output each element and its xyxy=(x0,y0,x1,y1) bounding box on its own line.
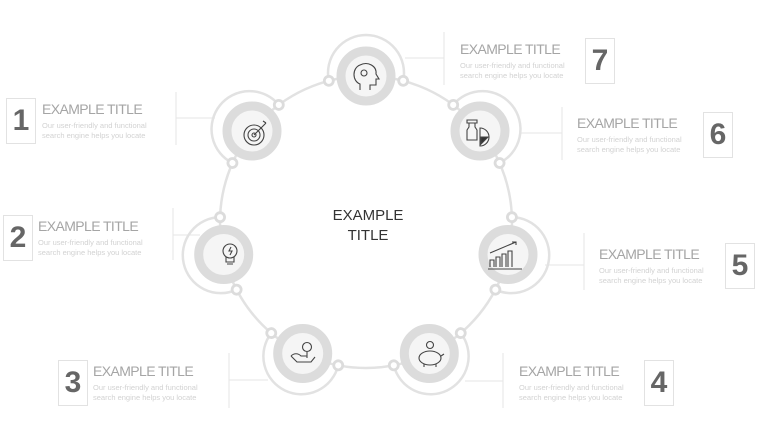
block 5: 5 xyxy=(732,249,748,282)
node discs xyxy=(199,51,533,378)
block 6: 6 xyxy=(710,118,726,151)
block 4: Our user-friendly and functional xyxy=(519,383,624,392)
main ring xyxy=(220,76,512,368)
icon: chess and pie xyxy=(467,120,489,146)
icon: bulb xyxy=(223,244,237,264)
block 3: 3 xyxy=(65,366,81,399)
icon: target xyxy=(244,121,266,145)
block 6: Our user-friendly and functional xyxy=(577,135,682,144)
block 1 xyxy=(6,98,147,144)
center title xyxy=(333,207,403,244)
block 2: search engine helps you locate xyxy=(38,248,141,257)
block 7: search engine helps you locate xyxy=(460,71,563,80)
block 1: EXAMPLE TITLE xyxy=(42,101,142,117)
node outer arcs xyxy=(175,35,557,407)
block 2: EXAMPLE TITLE xyxy=(38,218,138,234)
block 5 xyxy=(599,243,755,289)
icon: hand with coin xyxy=(291,342,315,362)
block 5: EXAMPLE TITLE xyxy=(599,246,699,262)
block 4: 4 xyxy=(651,366,667,399)
block 6 xyxy=(577,112,733,158)
block 1: Our user-friendly and functional xyxy=(42,121,147,130)
block 2: 2 xyxy=(10,221,26,254)
center title: TITLE xyxy=(348,227,388,244)
block 4 xyxy=(519,360,674,406)
block 7: 7 xyxy=(592,44,608,77)
block 3: Our user-friendly and functional xyxy=(93,383,198,392)
block 6: search engine helps you locate xyxy=(577,145,680,154)
block 7: Our user-friendly and functional xyxy=(460,61,565,70)
block 4: search engine helps you locate xyxy=(519,393,622,402)
block 3 xyxy=(58,360,198,406)
block 5: search engine helps you locate xyxy=(599,276,702,285)
leader lines xyxy=(173,32,584,408)
center title: EXAMPLE xyxy=(333,207,403,224)
block 3: search engine helps you locate xyxy=(93,393,196,402)
block 7 xyxy=(460,38,615,84)
icon: head xyxy=(354,64,379,90)
block 5: Our user-friendly and functional xyxy=(599,266,704,275)
icon: piggy bank xyxy=(419,342,444,367)
block 6: EXAMPLE TITLE xyxy=(577,115,677,131)
block 4: EXAMPLE TITLE xyxy=(519,363,619,379)
connector dots xyxy=(215,75,517,371)
block 1: 1 xyxy=(13,104,29,137)
block 1: search engine helps you locate xyxy=(42,131,145,140)
icon: growth chart xyxy=(488,242,522,269)
block 3: EXAMPLE TITLE xyxy=(93,363,193,379)
block 2: Our user-friendly and functional xyxy=(38,238,143,247)
block 2 xyxy=(3,215,143,261)
block 7: EXAMPLE TITLE xyxy=(460,41,560,57)
